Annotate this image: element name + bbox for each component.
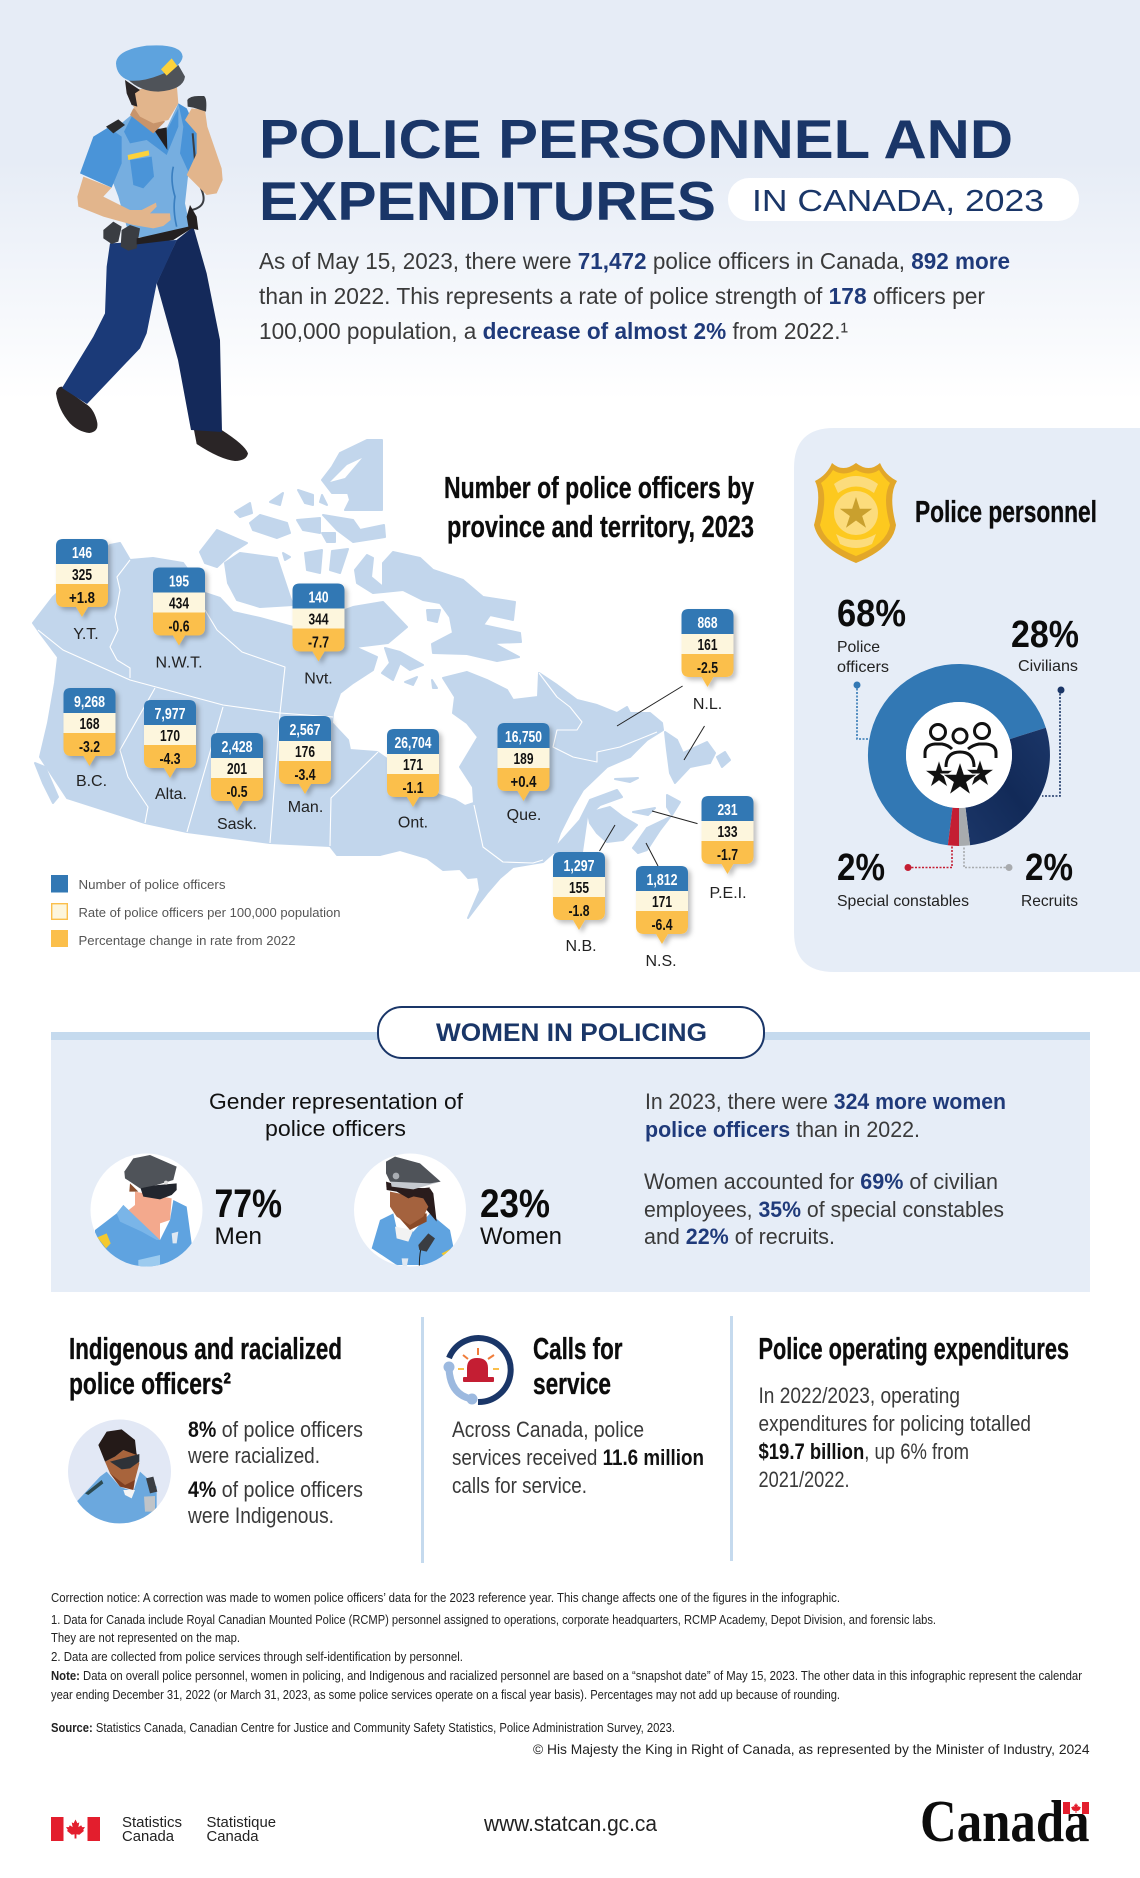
- text: expenditures: $19.7 billion, up 6% from: [758, 1439, 969, 1464]
- subtitle pill: IN CANADA, 2023: [752, 183, 1044, 218]
- text: expenditures: expenditures for policing totalled: [758, 1411, 1031, 1436]
- callout: Ontario: [387, 729, 439, 832]
- callout: Yukon: 146: [72, 545, 92, 562]
- stat: recruits 2%: 2%: [1025, 847, 1073, 889]
- text: 8% and 4%: were Indigenous.: [187, 1503, 334, 1528]
- map legend: Rate of police officers per 100,000 population: [78, 905, 340, 920]
- stat: men 77%: 77%: [214, 1182, 282, 1226]
- callout: Nunavut: [292, 584, 344, 688]
- map of Canada: [33, 440, 730, 918]
- text: 8% and 4%: [187, 1417, 363, 1528]
- callout: New Brunswick: 1,297: [564, 858, 595, 875]
- leader lines: [600, 686, 704, 866]
- callout: Ontario: 171: [403, 757, 423, 774]
- map heading: province and territory, 2023: [447, 509, 754, 544]
- callout: Quebec: +0.4: [510, 774, 537, 791]
- Statistics Canada logo: Statistique: [206, 1814, 276, 1831]
- heading: service: [533, 1366, 611, 1401]
- footnotes: [51, 1590, 1083, 1702]
- stat: police officers 68%: [837, 593, 906, 676]
- footnotes: 2. Data are collected from police services through self-identification by personnel.: [51, 1649, 463, 1664]
- text: women share: and 22% of recruits.: [644, 1224, 835, 1249]
- callout: Ontario: -1.1: [402, 780, 424, 797]
- callout: Manitoba: -3.4: [294, 767, 316, 784]
- intro paragraph: than in 2022. This represents a rate of police strength of 178 officers per: [259, 283, 985, 309]
- map legend: Number of police officers: [78, 877, 226, 892]
- heading: Indigenous and racialized: [69, 1331, 342, 1366]
- footnotes: Correction notice: A correction was made to women police officers’ data for the 2023 reference year. This change affects one of the figures in the infographic.: [51, 1590, 840, 1605]
- intro paragraph: [259, 248, 1010, 344]
- leader: special constables: [904, 846, 952, 871]
- callout: Northwest Territories: 195: [169, 574, 189, 590]
- callout: Prince Edward Island: -1.7: [717, 847, 738, 864]
- stat: police officers 68%: 68%: [837, 593, 906, 635]
- text: calls: [452, 1417, 704, 1498]
- callout: Prince Edward Island: P.E.I.: [709, 885, 747, 902]
- stat: women 23%: Women: [480, 1223, 562, 1250]
- callout: New Brunswick: N.B.: [565, 938, 597, 955]
- text: women police officers: In 2023, there were 324 more women: [645, 1089, 1006, 1114]
- leader: civilians: [1042, 686, 1064, 796]
- gender heading: police officers: [265, 1116, 406, 1141]
- callout: Quebec: Que.: [507, 807, 541, 824]
- callout: Nova Scotia: 171: [652, 894, 672, 911]
- callout: Manitoba: 176: [295, 744, 315, 761]
- callout: Newfoundland and Labrador: 161: [698, 637, 718, 654]
- gender heading: Gender representation of: [209, 1089, 464, 1114]
- donut chart: [868, 664, 1050, 846]
- title: POLICE PERSONNEL AND: [259, 108, 1013, 170]
- stat: recruits 2%: Recruits: [1021, 893, 1078, 910]
- heading pill: WOMEN IN POLICING: [436, 1019, 707, 1047]
- callout: Manitoba: Man.: [288, 799, 323, 816]
- text: women police officers: police officers than in 2022.: [645, 1117, 920, 1142]
- callout: Alberta: -4.3: [160, 751, 181, 768]
- stat: civilians 28%: Civilians: [1018, 658, 1078, 675]
- callout: Alberta: [144, 700, 196, 803]
- callout: Yukon: [56, 539, 108, 643]
- text: women share: [644, 1169, 1004, 1249]
- panel: police personnel: [794, 428, 1140, 972]
- callout: British Columbia: 168: [80, 716, 100, 733]
- callout: Nova Scotia: -6.4: [652, 917, 673, 934]
- callout: Newfoundland and Labrador: N.L.: [693, 696, 722, 713]
- stat: civilians 28%: [1011, 614, 1079, 675]
- callout: Nunavut: 344: [308, 612, 329, 628]
- column: Indigenous and racialized officers: [68, 1331, 363, 1528]
- callout: Saskatchewan: 2,428: [222, 739, 253, 756]
- callout: Yukon: 325: [72, 567, 92, 584]
- leader: recruits: [964, 846, 1012, 871]
- icon: officer with sunglasses: [68, 1420, 171, 1524]
- text: 8% and 4%: 8% of police officers: [188, 1417, 363, 1442]
- Statistics Canada logo: Statistics: [122, 1814, 182, 1831]
- map heading: [444, 470, 755, 544]
- copyright: © His Majesty the King in Right of Canada, as represented by the Minister of Industry, 2024: [533, 1741, 1090, 1757]
- text: calls: services received 11.6 million: [452, 1445, 704, 1470]
- footnotes: They are not represented on the map.: [51, 1630, 240, 1645]
- stat: men 77%: Men: [214, 1223, 262, 1250]
- callout: Nova Scotia: [636, 866, 688, 970]
- callout: Prince Edward Island: [702, 796, 754, 902]
- callout: Saskatchewan: -0.5: [226, 784, 248, 801]
- callout: Northwest Territories: -0.6: [168, 618, 190, 636]
- text: 8% and 4%: were racialized.: [187, 1443, 320, 1468]
- stat: civilians 28%: 28%: [1011, 614, 1079, 656]
- Statistics Canada logo: Canada: [206, 1828, 259, 1845]
- callout: Alberta: 170: [160, 728, 180, 745]
- map legend: [51, 875, 340, 948]
- callout: Newfoundland and Labrador: 868: [698, 615, 718, 632]
- callout: Ontario: Ont.: [398, 814, 428, 832]
- callout: Nunavut: -7.7: [308, 634, 329, 652]
- callout: Newfoundland and Labrador: -2.5: [697, 660, 718, 677]
- callout: Yukon: Y.T.: [73, 626, 99, 643]
- stat: recruits 2%: [1021, 847, 1078, 910]
- stat: women 23%: 23%: [480, 1182, 550, 1226]
- callout: Manitoba: [279, 716, 331, 816]
- heading: Calls for: [533, 1331, 622, 1366]
- text: women share: employees, 35% of special constables: [644, 1197, 1004, 1222]
- callout: Saskatchewan: 201: [227, 761, 247, 778]
- Statistics Canada logo: [51, 1814, 276, 1845]
- callout: Nova Scotia: N.S.: [645, 953, 677, 970]
- callout: New Brunswick: 155: [569, 880, 589, 897]
- map legend: Percentage change in rate from 2022: [78, 933, 296, 948]
- subtitle pill: [728, 178, 1079, 221]
- icon: police badge: [814, 463, 897, 563]
- footnotes: 1. Data for Canada include Royal Canadian Mounted Police (RCMP) personnel assigned to operations, corporate headquarters, RCMP Academy, Depot Division, and forensic labs.: [51, 1612, 936, 1627]
- callout: Nova Scotia: 1,812: [646, 872, 678, 889]
- callout: British Columbia: -3.2: [79, 739, 100, 756]
- icon: phone and siren: [444, 1338, 511, 1404]
- stat: men 77%: [214, 1182, 282, 1250]
- text: expenditures: In 2022/2023, operating: [758, 1383, 960, 1408]
- callout: Quebec: 16,750: [505, 729, 542, 746]
- title: EXPENDITURES: [259, 170, 716, 232]
- column: calls for service: [444, 1331, 704, 1498]
- heading: [533, 1331, 622, 1401]
- callout: Alberta: Alta.: [155, 786, 187, 803]
- callout: Northwest Territories: [153, 568, 205, 672]
- callout: Saskatchewan: Sask.: [217, 816, 257, 833]
- callout: Nunavut: Nvt.: [304, 670, 333, 688]
- callout: New Brunswick: -1.8: [568, 903, 590, 920]
- panel: women in policing: [51, 1007, 1090, 1292]
- Canada wordmark: Canada: [920, 1788, 1090, 1854]
- heading: police officers²: [69, 1366, 231, 1401]
- callout: Ontario: 26,704: [394, 735, 432, 752]
- text: expenditures: [758, 1383, 1031, 1492]
- text: women police officers: [645, 1089, 1006, 1142]
- leader: police officers: [854, 682, 869, 739]
- header background: [0, 0, 1140, 400]
- footnotes: year ending December 31, 2022 (or March 31, 2023, as some police services operate on a fiscal year basis). Percentages may not add up because of rounding.: [51, 1687, 840, 1702]
- icon: female officer: [354, 1154, 466, 1267]
- divider: [421, 1317, 424, 1563]
- stat: special constables 2%: Special constables: [837, 893, 969, 910]
- map heading: Number of police officers by: [444, 470, 755, 505]
- intro paragraph: 100,000 population, a decrease of almost 2% from 2022.¹: [259, 318, 848, 344]
- callout: Nunavut: 140: [308, 590, 329, 606]
- stat: special constables 2%: [837, 847, 969, 910]
- stat: women 23%: [480, 1182, 562, 1250]
- callout: Manitoba: 2,567: [290, 722, 321, 739]
- callout: Quebec: 189: [514, 751, 534, 768]
- column: police operating expenditures: [758, 1331, 1069, 1492]
- callout: Northwest Territories: 434: [169, 596, 189, 612]
- intro paragraph: As of May 15, 2023, there were 71,472 police officers in Canada, 892 more: [259, 248, 1010, 274]
- text: expenditures: 2021/2022.: [758, 1467, 850, 1492]
- website: www.statcan.gc.ca: [483, 1811, 658, 1836]
- callout: British Columbia: [64, 688, 116, 790]
- callout: Northwest Territories: N.W.T.: [155, 654, 203, 672]
- stat: police officers 68%: Police: [837, 639, 880, 656]
- text: women share: Women accounted for 69% of civilian: [644, 1169, 998, 1194]
- heading pill: [378, 1007, 764, 1058]
- callout: Newfoundland and Labrador: [682, 609, 734, 713]
- callout: Alberta: 7,977: [154, 706, 186, 723]
- stat: special constables 2%: 2%: [837, 847, 885, 889]
- illustration: police officer with radio: [56, 45, 248, 461]
- text: calls: Across Canada, police: [452, 1417, 644, 1442]
- callout: Saskatchewan: [211, 733, 263, 833]
- callout: British Columbia: 9,268: [74, 694, 105, 711]
- heading: [69, 1331, 342, 1401]
- callout: Quebec: [498, 723, 550, 824]
- gender heading: [209, 1089, 464, 1141]
- Statistics Canada logo: Canada: [122, 1828, 175, 1845]
- stat: police officers 68%: officers: [837, 659, 889, 676]
- text: calls: calls for service.: [452, 1473, 587, 1498]
- icon: male officer: [90, 1154, 202, 1267]
- callout: Prince Edward Island: 231: [718, 802, 738, 819]
- callout: British Columbia: B.C.: [76, 773, 107, 790]
- callout: New Brunswick: [553, 852, 605, 955]
- callout: Prince Edward Island: 133: [718, 824, 738, 841]
- text: 8% and 4%: 4% of police officers: [188, 1477, 363, 1502]
- callout: Yukon: +1.8: [69, 590, 95, 607]
- source: Source: Statistics Canada, Canadian Centre for Justice and Community Safety Statistics, Police Administration Survey, 2023.: [51, 1720, 675, 1735]
- icon: officers and stars: [925, 724, 996, 795]
- divider: [730, 1316, 733, 1561]
- title: [259, 108, 1013, 232]
